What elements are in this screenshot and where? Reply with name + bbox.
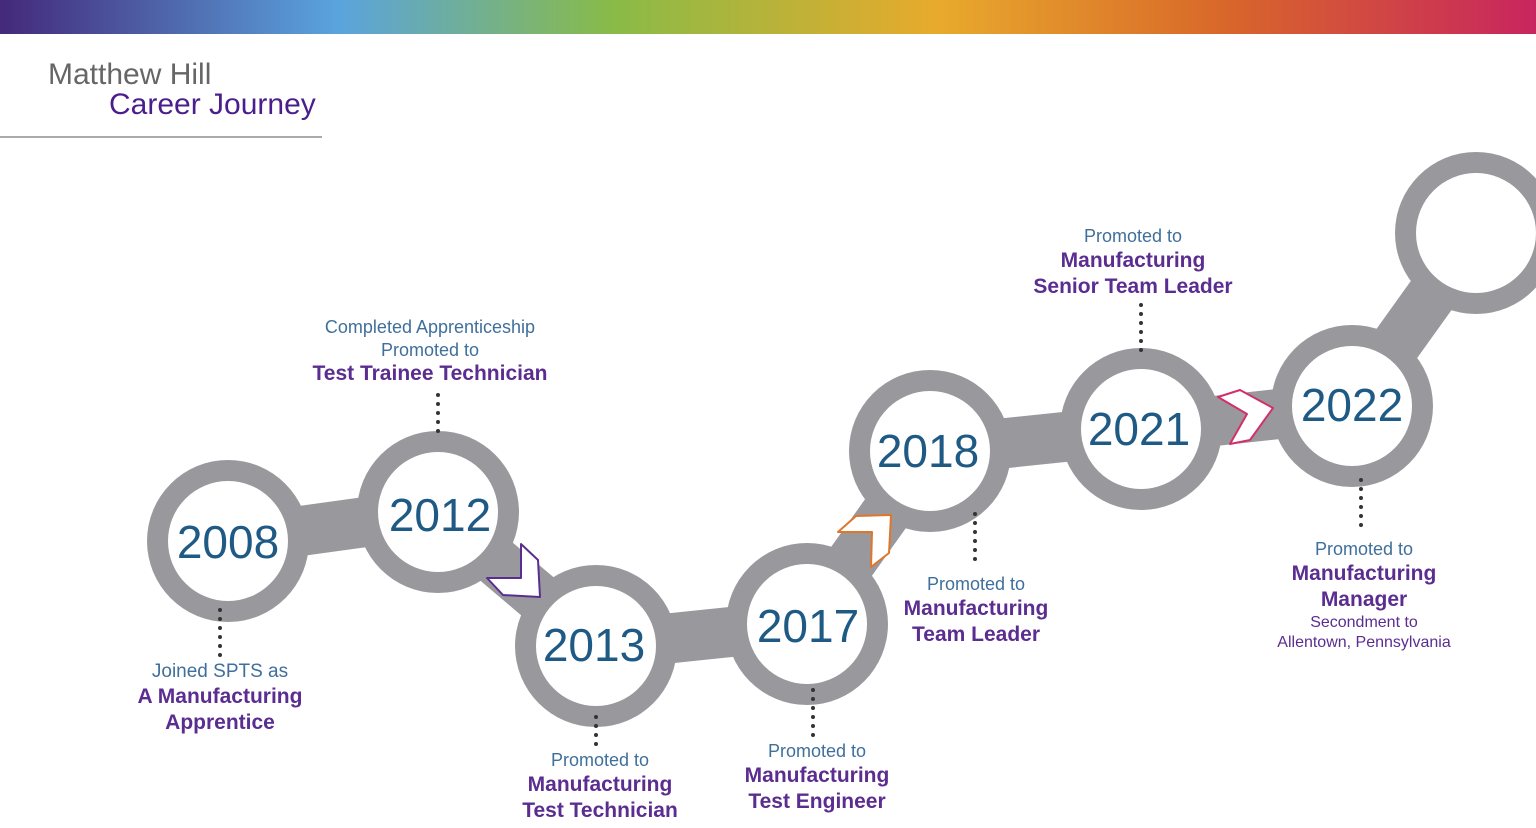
label 2022: Allentown, Pennsylvania	[1277, 634, 1451, 651]
label 2013	[522, 750, 678, 822]
timeline chain: 2021	[1088, 403, 1190, 455]
label 2008: Apprentice	[165, 711, 275, 734]
label 2018: Promoted to	[927, 574, 1025, 594]
label 2017: Test Engineer	[748, 790, 886, 813]
label 2012: Test Trainee Technician	[313, 362, 547, 385]
timeline chain: 2018	[877, 425, 979, 477]
title: Matthew Hill	[48, 58, 211, 91]
label 2018	[904, 574, 1048, 646]
label 2022: Manager	[1321, 588, 1407, 611]
label 2012: Completed Apprenticeship	[325, 317, 535, 337]
label 2017	[745, 741, 889, 813]
label 2008: Joined SPTS as	[152, 661, 288, 682]
label 2013: Test Technician	[522, 799, 678, 822]
label 2017: Promoted to	[768, 741, 866, 761]
label 2021: Manufacturing	[1061, 248, 1205, 272]
timeline chain: 2022	[1301, 379, 1403, 431]
label 2022: Manufacturing	[1292, 562, 1436, 584]
timeline chain: 2013	[543, 619, 645, 671]
label 2008	[138, 661, 302, 734]
label 2022	[1277, 539, 1451, 651]
label 2022: Promoted to	[1315, 539, 1413, 559]
title	[0, 58, 322, 138]
timeline chain: 2012	[389, 489, 491, 541]
label 2017: Manufacturing	[745, 764, 889, 786]
label 2008: A Manufacturing	[138, 685, 302, 708]
label 2018: Manufacturing	[904, 596, 1048, 620]
label 2012: Promoted to	[381, 340, 479, 360]
title: Career Journey	[109, 88, 316, 121]
label 2012	[312, 317, 547, 385]
label 2018: Team Leader	[912, 623, 1040, 646]
label 2013: Promoted to	[551, 750, 649, 770]
label 2021: Promoted to	[1084, 226, 1182, 246]
timeline chain: 2017	[757, 600, 859, 652]
label 2022: Secondment to	[1310, 614, 1418, 631]
timeline chain: 2008	[177, 516, 279, 568]
label 2021	[1033, 226, 1233, 298]
label 2013: Manufacturing	[528, 772, 672, 796]
gradient header bar	[0, 0, 1536, 34]
label 2021: Senior Team Leader	[1033, 275, 1233, 298]
